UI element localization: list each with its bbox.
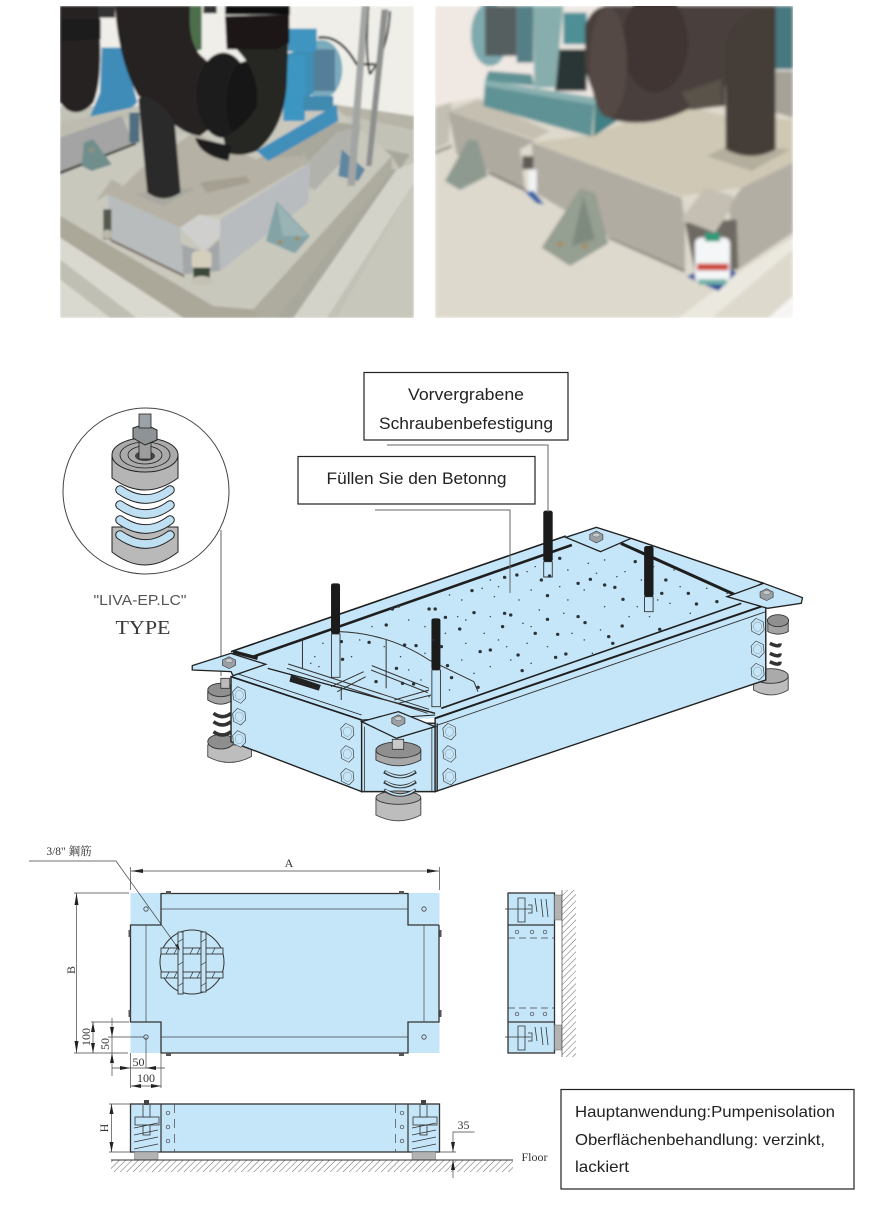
isolator [192,251,212,269]
dimension A: A [285,856,294,870]
dimension 35 [438,1118,474,1178]
dimensions 50 and 100 horizontal: 100 [137,1071,155,1085]
floor strip [678,238,793,318]
big bracket [266,201,310,253]
dimensions 100 and 50 vertical: 100 [79,1028,93,1046]
concrete aggregate [341,558,717,687]
icon: top cup [112,455,178,490]
label: LIVA-EP.LC type: TYPE [116,617,170,639]
callout: pre-embedded bolts [364,372,568,440]
brackets [445,139,488,190]
side view drawing [505,890,576,1057]
plan view drawing [128,891,442,1056]
callout: pre-embedded bolts: Schraubenbefestigung [379,414,553,433]
cut-away and rebar [287,632,478,713]
plate nuts [222,657,236,669]
motor [310,38,344,98]
left spring [208,678,251,762]
dimension H [97,1104,130,1152]
dimension B [64,893,129,1053]
pipes [98,6,115,18]
main block top [96,133,309,228]
rim outlines [231,536,766,720]
rebar mesh detail [160,930,224,994]
dimension H: H [97,1123,111,1132]
note box: application and surface treatment: lackiert [575,1159,630,1176]
dimensions 100 and 50 vertical: 50 [98,1038,112,1050]
pipe [708,148,788,171]
note box: application and surface treatment: Oberflächenbehandlung: verzinkt, [575,1132,825,1149]
detail circle: LIVA-EP.LC spring isolator [63,408,229,574]
pipe plate [139,188,191,205]
main block faces [108,194,183,274]
dimension A [130,856,440,890]
motor [471,3,509,66]
front spring [376,739,421,821]
rear block [257,123,362,161]
dimensions 50 and 100 horizontal: 50 [132,1055,144,1069]
top surface fill [231,527,803,720]
small isolator [522,156,533,169]
callout: pre-embedded bolts: Vorvergrabene [408,385,524,404]
dimensions 50 and 100 horizontal [112,1037,165,1088]
rebar label and leader: 3/8" 鋼筋 [46,844,92,858]
front elevation drawing [111,1100,513,1172]
leader lines: concrete and bolts [375,445,548,593]
icon: bolt and nut [139,437,151,459]
callout: fill concrete: Füllen Sie den Betonng [326,469,506,488]
side bolts [233,687,246,703]
right face [435,605,766,792]
left face [231,677,362,792]
left block [448,99,550,139]
left pump [90,48,137,117]
icon: coil spring [120,490,170,544]
isometric inertia base [192,511,803,821]
left block [60,111,132,139]
rods [331,511,654,707]
volute [585,6,778,123]
label: LIVA-EP.LC type: "LIVA-EP.LC" [94,592,186,609]
rods [347,6,368,186]
label: LIVA-EP.LC type [94,592,186,639]
right back spring [753,615,789,695]
note box: application and surface treatment: Hauptanwendung:Pumpenisolation [575,1104,835,1121]
callout: fill concrete [298,456,535,504]
rebar label and leader [29,844,180,951]
floor label: Floor [521,1150,548,1164]
dimensions 100 and 50 vertical [79,1018,144,1076]
dimension B: B [64,966,78,974]
corner column [362,722,435,792]
corner plates [192,527,803,738]
note box: application and surface treatment [561,1090,854,1189]
isolator [687,268,737,291]
dimension 35: 35 [458,1118,470,1132]
photo: inertia base close-up with spring isolator [435,0,793,318]
leader line: isolator [220,530,222,676]
main block [532,103,793,196]
photo: pump on inertia base, wide view [60,6,414,318]
plinth [385,150,410,168]
icon: bottom cup [112,527,178,565]
